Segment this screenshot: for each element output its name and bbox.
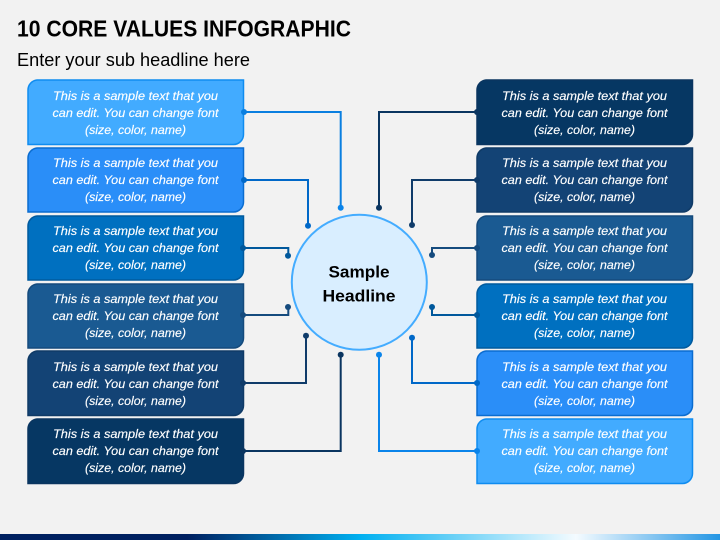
panel: left box 2: This is a sample text that you bbox=[53, 156, 218, 170]
panel: right box 2: can edit. You can change font bbox=[502, 173, 668, 187]
connector: right 6 bbox=[376, 352, 480, 454]
panel: right box 1: This is a sample text that you bbox=[502, 89, 667, 103]
panel: right box 2 bbox=[477, 148, 692, 212]
panel: right box 2: This is a sample text that you bbox=[502, 156, 667, 170]
central circle headline: Sample bbox=[328, 262, 390, 282]
panel: right box 6: can edit. You can change font bbox=[502, 444, 668, 458]
panel: left box 4: can edit. You can change font bbox=[52, 309, 219, 323]
panel: right box 5 bbox=[477, 351, 692, 416]
connector: left 3 bbox=[240, 245, 291, 259]
panel: left box 5: This is a sample text that you bbox=[53, 360, 218, 374]
connector: left 2 bbox=[241, 177, 311, 229]
panel: left box 2 bbox=[28, 148, 243, 212]
panel: left box 3: This is a sample text that you bbox=[53, 224, 218, 238]
panel: left box 5 bbox=[28, 351, 243, 416]
panel: right box 5: This is a sample text that you bbox=[502, 360, 667, 374]
panel: left box 6: (size, color, name) bbox=[85, 461, 186, 475]
panel: left box 4: (size, color, name) bbox=[85, 326, 186, 340]
sub headline: Enter your sub headline here bbox=[17, 50, 250, 70]
panel: right box 6: (size, color, name) bbox=[534, 461, 635, 475]
connector: right 4 bbox=[429, 304, 480, 318]
connector: left 4 bbox=[240, 304, 291, 318]
panel: right box 3: This is a sample text that you bbox=[502, 224, 667, 238]
panel: right box 1 bbox=[477, 80, 692, 144]
panel: left box 2: can edit. You can change font bbox=[52, 173, 219, 187]
panel: right box 6 bbox=[477, 419, 692, 484]
panel: left box 5: can edit. You can change font bbox=[52, 377, 219, 391]
panel: left box 6: This is a sample text that you bbox=[53, 427, 218, 441]
panel: right box 5: can edit. You can change font bbox=[502, 377, 668, 391]
connector: left 1 bbox=[241, 109, 344, 211]
panel: left box 1: (size, color, name) bbox=[85, 123, 186, 137]
panel: left box 6 bbox=[28, 419, 243, 484]
panel: left box 4 bbox=[28, 284, 243, 348]
panel: right box 3: can edit. You can change font bbox=[502, 241, 668, 255]
panel: right box 4: (size, color, name) bbox=[534, 326, 635, 340]
bottom gradient bar bbox=[0, 534, 720, 540]
connector: right 5 bbox=[409, 335, 480, 386]
panel: left box 3: can edit. You can change font bbox=[52, 241, 219, 255]
panel: right box 6: This is a sample text that you bbox=[502, 427, 667, 441]
panel: left box 1 bbox=[28, 80, 243, 144]
connector: left 6 bbox=[240, 352, 344, 454]
panel: left box 4: This is a sample text that you bbox=[53, 292, 218, 306]
panel: right box 3 bbox=[477, 216, 692, 280]
connector: right 2 bbox=[409, 177, 480, 228]
panel: right box 4: can edit. You can change font bbox=[502, 309, 668, 323]
panel: left box 3 bbox=[28, 216, 243, 280]
panel: left box 1: can edit. You can change font bbox=[52, 106, 219, 120]
panel: right box 1: can edit. You can change font bbox=[502, 106, 668, 120]
panel: right box 3: (size, color, name) bbox=[534, 258, 635, 272]
panel: left box 5: (size, color, name) bbox=[85, 394, 186, 408]
panel: right box 2: (size, color, name) bbox=[534, 190, 635, 204]
panel: left box 3: (size, color, name) bbox=[85, 258, 186, 272]
central circle headline: Headline bbox=[322, 286, 396, 306]
panel: right box 5: (size, color, name) bbox=[534, 394, 635, 408]
panel: right box 4 bbox=[477, 284, 692, 348]
panel: left box 6: can edit. You can change font bbox=[52, 444, 219, 458]
panel: right box 1: (size, color, name) bbox=[534, 123, 635, 137]
connector: left 5 bbox=[240, 333, 309, 386]
connector: right 1 bbox=[376, 109, 480, 211]
central circle headline bbox=[292, 215, 427, 350]
panel: right box 4: This is a sample text that you bbox=[502, 292, 667, 306]
connector: right 3 bbox=[429, 245, 480, 258]
panel: left box 2: (size, color, name) bbox=[85, 190, 186, 204]
title: 10 CORE VALUES INFOGRAPHIC bbox=[17, 16, 351, 42]
panel: left box 1: This is a sample text that you bbox=[53, 89, 218, 103]
